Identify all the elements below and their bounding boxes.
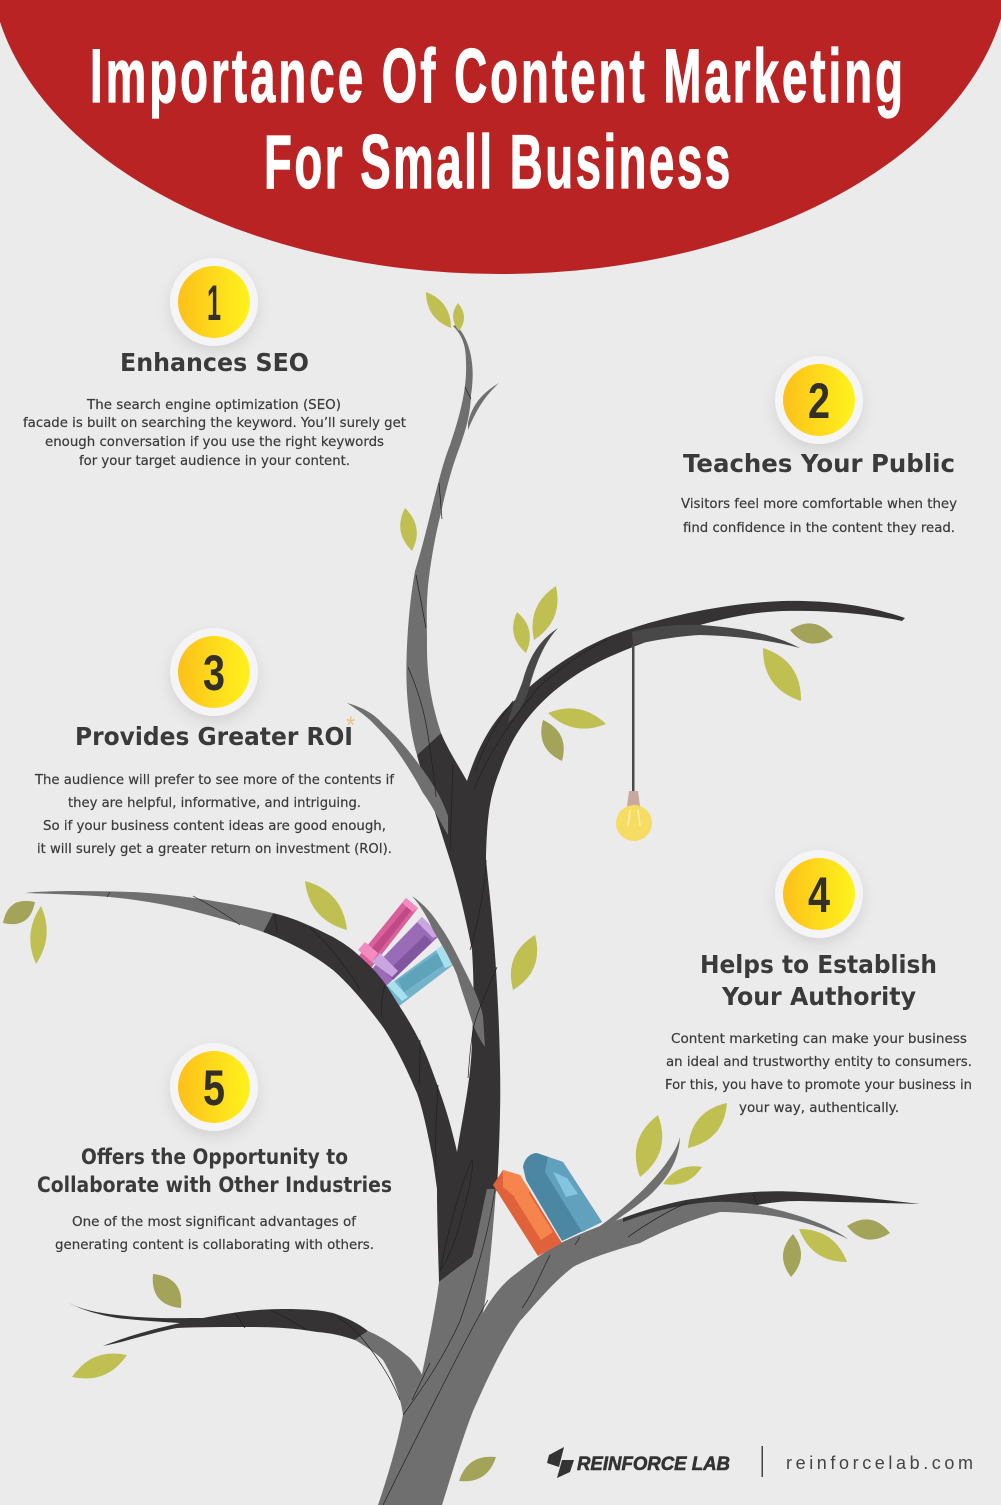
icon: stacked books on left branch: [354, 898, 453, 1007]
icon: number 1 badge: 1: [207, 275, 221, 331]
tree: gray twig near purple books: [412, 896, 485, 1047]
heading: Offers the Opportunity to: [81, 1145, 348, 1169]
text block: [681, 496, 957, 536]
tree: dark main trunk: [263, 601, 905, 1282]
text block: Content marketing can make your business: [671, 1031, 967, 1047]
text block: they are helpful, informative, and intriguing.: [68, 795, 361, 811]
heading: Enhances SEO: [120, 348, 309, 377]
icon: number 5 badge: [170, 1043, 258, 1131]
heading: Provides Greater ROI: [75, 722, 353, 751]
tree: bark lines: [107, 387, 758, 1505]
text block: find confidence in the content they read.: [683, 520, 955, 536]
tree: lower left branch dark: [66, 1301, 368, 1346]
icon: number 4 badge: [775, 850, 863, 938]
text block: [23, 397, 406, 469]
panel: item 1 enhances SEO: [23, 258, 406, 469]
title: For Small Business: [264, 120, 730, 205]
icon: number 2 badge: [775, 356, 863, 444]
heading: Teaches Your Public: [683, 449, 955, 478]
text block: enough conversation if you use the right keywords: [45, 434, 384, 450]
text block: Visitors feel more comfortable when they: [681, 496, 957, 512]
text block: For this, you have to promote your business in: [665, 1077, 972, 1093]
tree: twig on right limb: [508, 628, 558, 723]
text block: facade is built on searching the keyword. You’ll surely get: [23, 415, 406, 431]
tree: dark upper right-limb strip: [623, 1191, 920, 1222]
text block: [55, 1214, 374, 1253]
title: [90, 34, 903, 205]
footer: logo and website: [547, 1446, 973, 1478]
text block: for your target audience in your content.: [79, 453, 350, 469]
tree: twig above lower right limb: [600, 1137, 680, 1228]
divider: [762, 1446, 763, 1477]
panel: item 5 collaborate with other industries: [37, 1043, 392, 1253]
text block: it will surely get a greater return on investment (ROI).: [37, 841, 392, 857]
icon: orange and blue books on right limb: [493, 1153, 602, 1256]
header banner: [0, 0, 1001, 274]
heading: Collaborate with Other Industries: [37, 1173, 392, 1197]
text block: [665, 1031, 972, 1116]
heading: [700, 950, 937, 1011]
tree: lower left branch gray: [355, 1331, 422, 1415]
icon: number 4 badge: 4: [808, 867, 830, 923]
text block: generating content is collaborating with others.: [55, 1237, 374, 1253]
text block: your way, authentically.: [739, 1100, 899, 1116]
heading: Helps to Establish: [700, 950, 937, 979]
tree: upper gray stem: [406, 325, 473, 755]
text block: [34, 772, 395, 857]
text block: One of the most significant advantages of: [72, 1214, 357, 1230]
icon: number 3 badge: [170, 628, 258, 716]
panel: item 2 teaches your public: [681, 356, 957, 536]
panel: item 3 provides greater ROI: [34, 628, 395, 857]
text block: an ideal and trustworthy entity to consumers.: [666, 1054, 972, 1070]
icon: number 5 badge: 5: [203, 1060, 225, 1116]
tree: upper twig: [468, 383, 499, 430]
website: reinforcelab.com: [786, 1453, 973, 1473]
tree: lighter sub-branch under right limb: [632, 625, 800, 648]
icon: small asterisk: *: [346, 712, 355, 739]
leaves: [3, 292, 890, 1481]
logo wordmark: REINFORCE LAB: [577, 1454, 730, 1475]
text block: The search engine optimization (SEO): [86, 397, 341, 413]
panel: item 4 establish authority: [665, 850, 972, 1116]
title: Importance Of Content Marketing: [90, 34, 903, 119]
icon: hanging light bulb: [616, 645, 652, 841]
text block: The audience will prefer to see more of the contents if: [34, 772, 395, 788]
icon: number 2 badge: 2: [808, 373, 830, 429]
heading: [37, 1145, 392, 1197]
icon: number 1 badge: [170, 258, 258, 346]
tree: left branch gray tip: [25, 891, 273, 932]
icon: number 3 badge: 3: [203, 645, 225, 701]
tree: gray left twig: [347, 703, 448, 835]
tree: [25, 325, 920, 1505]
text block: So if your business content ideas are good enough,: [43, 818, 386, 834]
icon: logo mark: [547, 1447, 574, 1478]
tree: lower gray trunk and right limb: [378, 1189, 848, 1505]
heading: Your Authority: [721, 982, 916, 1011]
